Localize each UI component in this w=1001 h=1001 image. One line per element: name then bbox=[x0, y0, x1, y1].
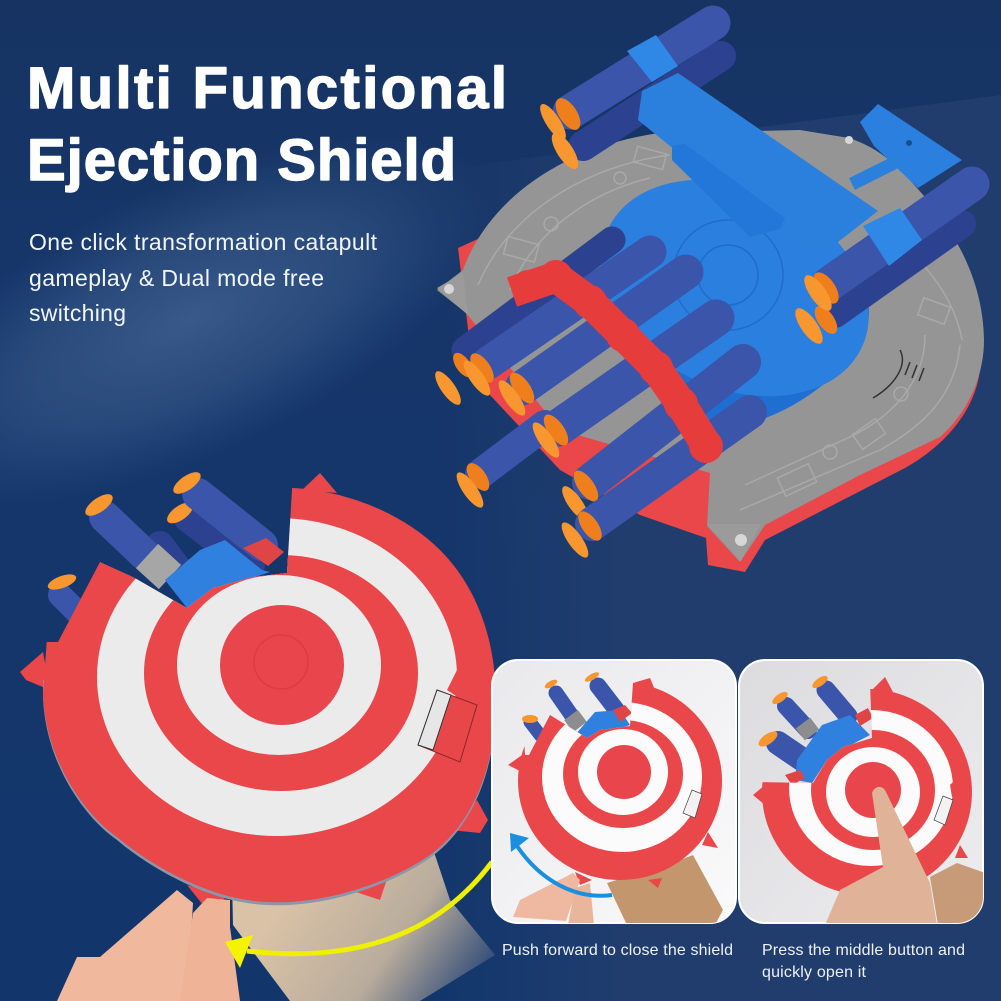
blue round base bbox=[635, 243, 895, 461]
inset fingers bbox=[513, 873, 580, 921]
top left pair of darts bbox=[536, 23, 721, 173]
title: Ejection Shield bbox=[27, 128, 456, 193]
red dart band bbox=[512, 260, 723, 463]
dart bundle with suction cups bbox=[431, 240, 750, 561]
caption: press button bbox=[762, 942, 965, 981]
shield tabs bbox=[20, 473, 488, 905]
caption: push forward: Push forward to close the shield bbox=[502, 942, 733, 959]
product photo: opened shield back view with darts bbox=[431, 23, 984, 572]
grip rod bbox=[852, 160, 900, 184]
inset shield bbox=[508, 678, 722, 888]
bottom mounting tab bbox=[707, 524, 761, 561]
subtitle text: One click transformation catapult bbox=[29, 229, 378, 255]
inset darts bbox=[522, 670, 632, 740]
title bbox=[27, 56, 507, 193]
inset card: press button bbox=[739, 660, 985, 925]
main front shield bbox=[20, 460, 496, 905]
centre button bbox=[220, 605, 344, 725]
left mounting tab bbox=[437, 273, 468, 315]
caption: press button: quickly open it bbox=[762, 964, 867, 981]
blue handle body bbox=[638, 73, 878, 259]
inset wrist bbox=[607, 855, 723, 925]
caption: press button: Press the middle button and bbox=[762, 942, 965, 959]
title: Multi Functional bbox=[27, 56, 507, 121]
grey disc bbox=[437, 130, 984, 562]
blue curved arrow bbox=[517, 846, 612, 896]
inset card: push forward bbox=[492, 660, 736, 925]
inner white ring bbox=[177, 575, 381, 755]
grey disc embossed pattern bbox=[478, 146, 962, 510]
right grip bbox=[860, 104, 962, 188]
shield disc and rings bbox=[43, 460, 496, 905]
red shield rim underneath bbox=[458, 200, 981, 572]
inset back hand bbox=[930, 863, 985, 925]
handle lower clip bbox=[672, 144, 785, 237]
subtitle text: switching bbox=[29, 300, 126, 326]
inset pressing hand bbox=[825, 787, 937, 925]
right pair of darts bbox=[790, 184, 972, 348]
yellow curved arrow bbox=[225, 862, 492, 968]
inset open shield bbox=[753, 677, 972, 895]
subtitle text: gameplay & Dual mode free bbox=[29, 265, 324, 291]
fingers holding shield bbox=[57, 890, 240, 1001]
blue dart clips bbox=[627, 35, 922, 266]
inset darts bbox=[756, 674, 873, 785]
blue plate bbox=[566, 138, 904, 438]
front shield darts bbox=[46, 468, 284, 625]
subtitle text bbox=[29, 229, 378, 326]
label sticker bbox=[418, 660, 477, 762]
wrist behind main shield bbox=[232, 840, 495, 1001]
